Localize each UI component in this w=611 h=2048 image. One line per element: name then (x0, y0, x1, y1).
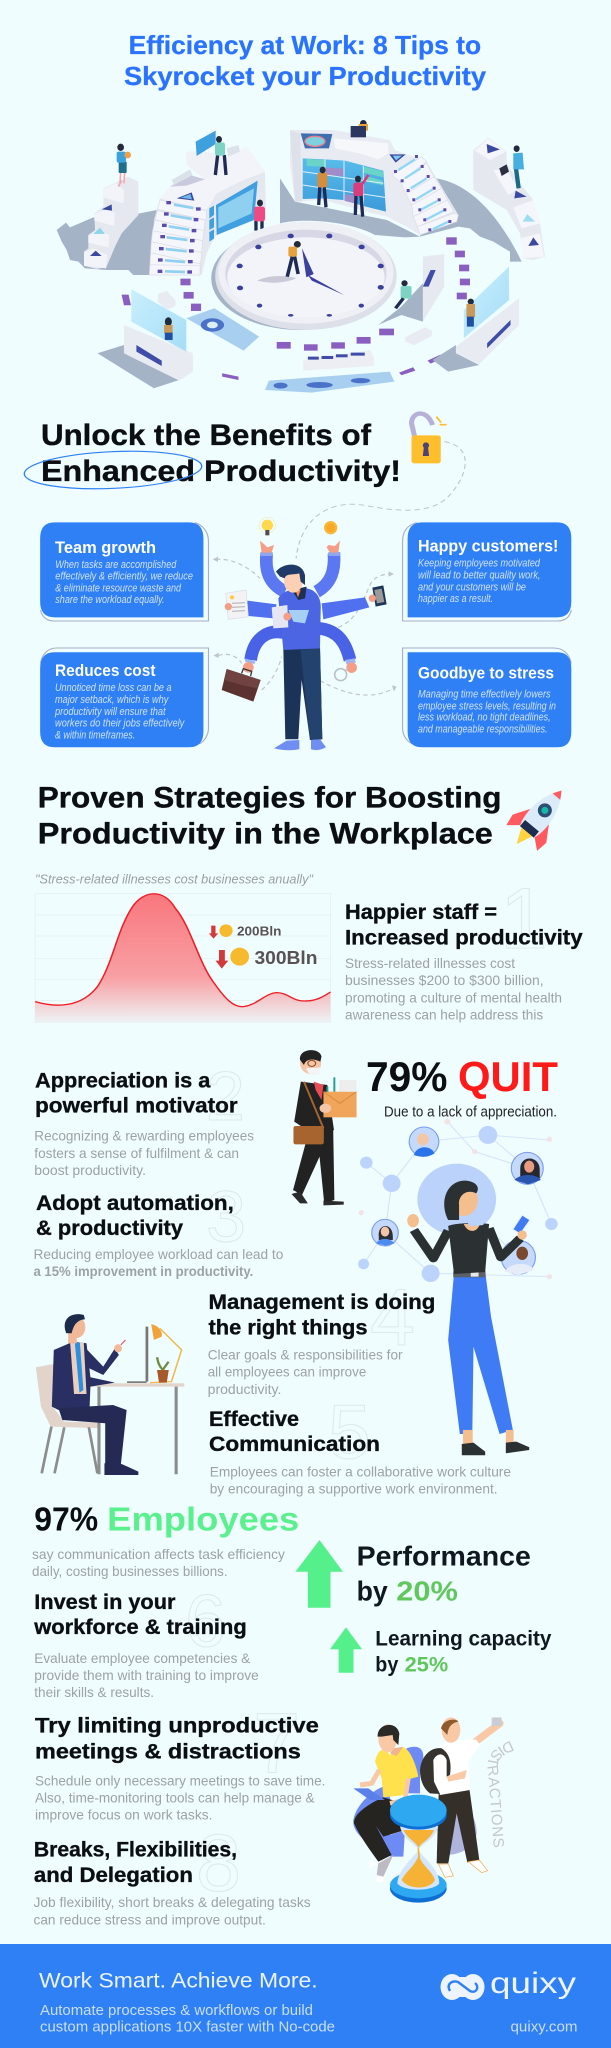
standing man (420, 1717, 502, 1877)
title: Efficiency at Work: 8 Tips to (129, 30, 481, 60)
dashed arrows around figure (216, 559, 393, 695)
card: team growth: effectively & efficiently, we reduce (55, 571, 193, 583)
tip 3: automation: Reducing employee workload can lead to (34, 1246, 284, 1262)
card: goodbye to stress (418, 665, 556, 735)
card: reduces cost: productivity will ensure that (54, 706, 167, 718)
left stairs with woman (84, 144, 138, 269)
heading: unlock the benefits: Unlock the Benefits of (41, 419, 372, 452)
chart values (237, 925, 318, 968)
right half of the office (280, 120, 545, 262)
icon: paper (226, 590, 248, 619)
tip 4: management: the right things (208, 1316, 368, 1339)
icon: open padlock (412, 414, 447, 463)
footer message: custom applications 10X faster with No-code (40, 2019, 335, 2036)
tip 6: training: 6 (185, 1580, 226, 1663)
purple floor tiles (122, 237, 470, 380)
tip 4: management: Clear goals & responsibilities for (208, 1346, 403, 1362)
tip 8: breaks: Job flexibility, short breaks & delegating tasks (34, 1894, 311, 1910)
tip 7: meetings: meetings & distractions (35, 1740, 301, 1764)
card: team growth: Team growth (55, 539, 156, 557)
tip 6: training: their skills & results. (34, 1684, 154, 1700)
tip 7: meetings: Try limiting unproductive (35, 1713, 319, 1737)
right tower steps (392, 157, 458, 235)
clock (211, 222, 397, 330)
tip 8: breaks: and Delegation (34, 1864, 193, 1887)
tip 1: happier staff: businesses $200 to $300 billion, (345, 972, 544, 988)
chart values: 300Bln (254, 948, 318, 968)
card: team growth (55, 539, 193, 606)
card: goodbye to stress: Goodbye to stress (418, 665, 554, 683)
distractions curved label: DISTRACTIONS (488, 1741, 514, 1848)
footer band (0, 1944, 611, 2048)
tip 7: meetings: improve focus on work tasks. (35, 1807, 212, 1823)
tip 5: communication: Employees can foster a collaborative work culture (210, 1463, 511, 1479)
stat: learning capacity by 25% (375, 1628, 552, 1677)
left tower building (149, 131, 266, 275)
tip 1: happier staff: Stress-related illnesses cost (345, 955, 515, 971)
icon: tablet and cup (288, 610, 309, 623)
heading: unlock the benefits: Enhanced Productivity! (41, 455, 401, 488)
stat: learning capacity by 25%: Learning capacity (375, 1628, 552, 1651)
tip 8: breaks: can reduce stress and improve output. (34, 1911, 266, 1927)
benefits illustration layer (23, 414, 571, 747)
highlight ellipse (23, 448, 203, 492)
card: reduces cost: workers do their jobs effectively (55, 718, 185, 730)
stat: learning capacity by 25%: by (375, 1654, 399, 1677)
card backgrounds (40, 522, 571, 747)
trousers and shoes (283, 647, 322, 740)
tip 2: appreciation: 2 (206, 1057, 245, 1135)
stat: 97% employees: daily, costing businesses billions. (32, 1563, 228, 1579)
illustration: man quitting with box (291, 1050, 357, 1205)
tip 5: communication: Communication (209, 1433, 380, 1456)
network links (364, 1122, 551, 1277)
tip 4: management: all employees can improve (208, 1364, 366, 1380)
card: goodbye to stress: and manageable responsibilities. (418, 723, 548, 735)
stat: 79% quit: Due to a lack of appreciation. (384, 1104, 557, 1120)
heading: proven strategies: Productivity in the Workplace (38, 817, 493, 850)
hero illustration: isometric clock office (57, 120, 545, 393)
card: reduces cost: major setback, which is why (55, 694, 169, 706)
arrow: performance up (295, 1540, 343, 1608)
tip 4: management: productivity. (208, 1381, 281, 1397)
tip 7: meetings (35, 1697, 325, 1823)
tip 2: appreciation: Recognizing & rewarding employees (34, 1128, 254, 1144)
tip 7: meetings: Also, time-monitoring tools can help manage & (35, 1790, 315, 1806)
tip 7: meetings: 7 (253, 1697, 300, 1792)
icon: magnifier ring (335, 669, 347, 681)
right stairs with man (473, 138, 545, 260)
arrow: learning up (330, 1627, 362, 1673)
chart caption: "Stress-related illnesses cost businesses anually" (35, 873, 314, 887)
illustration: woman with network (358, 1119, 558, 1455)
stat: 97% employees: Employees (107, 1501, 299, 1538)
tip 4: management: Management is doing (208, 1291, 435, 1314)
illustration: man at desk (36, 1314, 184, 1475)
tip 7: meetings: Schedule only necessary meetings to save time. (35, 1772, 325, 1788)
card: team growth: & eliminate resource waste and (55, 582, 182, 594)
card: goodbye to stress: less workload, no tight deadlines, (418, 712, 551, 724)
stat: 97% employees: 97% (34, 1501, 98, 1538)
tip 1: happier staff: 1 (500, 871, 548, 967)
icon: phone (372, 585, 387, 607)
icon: light bulb (259, 517, 275, 535)
card: reduces cost: & within timeframes. (55, 729, 135, 741)
seat blobs (353, 1747, 423, 1853)
tip 2: appreciation (34, 1057, 254, 1178)
down arrows and coins (209, 926, 218, 939)
tip 5: communication (209, 1389, 511, 1496)
heading: proven strategies: Proven Strategies for Boosting (38, 782, 502, 815)
tip 3: automation: & productivity (36, 1217, 183, 1240)
woman figure (407, 1181, 530, 1455)
card: reduces cost: Reduces cost (55, 662, 156, 680)
brand name (490, 1967, 578, 2036)
tip 6: training: Invest in your (34, 1591, 175, 1614)
tip 1: happier staff (345, 871, 583, 1022)
stat: performance by 20%: 20% (396, 1576, 458, 1607)
card: reduces cost: Unnoticed time loss can be a (55, 682, 172, 694)
tip 6: training: Evaluate employee competencies & (34, 1650, 251, 1666)
area chart: cost of stress (35, 894, 330, 1023)
icon: rocket (500, 776, 578, 858)
illustration: people and hourglass (353, 1717, 514, 1903)
tip 4: management (208, 1273, 435, 1397)
tip 3: automation (34, 1178, 284, 1279)
arms (251, 553, 350, 660)
heading: proven strategies (38, 782, 502, 850)
title (124, 30, 487, 91)
brand name: quixy (490, 1967, 576, 2000)
title: Skyrocket your Productivity (124, 61, 487, 91)
icon: coin (324, 521, 337, 534)
stat: performance by 20% (357, 1540, 531, 1607)
tip 1: happier staff: Increased productivity (345, 926, 583, 949)
icon: quixy logo (440, 1974, 484, 2000)
tip 2: appreciation: fosters a sense of fulfilment & can (34, 1145, 239, 1161)
torso and head (278, 588, 321, 650)
stat: 97% employees (32, 1501, 299, 1579)
tip 5: communication: Effective (209, 1408, 299, 1431)
card: team growth: When tasks are accomplished (55, 559, 177, 571)
avatars (372, 1127, 543, 1275)
tip 1: happier staff: awareness can help address this (345, 1006, 543, 1022)
tip 5: communication: by encouraging a supportive work environment. (210, 1480, 498, 1496)
dashed connector from lock (296, 442, 465, 558)
heading: unlock the benefits (41, 419, 401, 488)
card: team growth: share the workload equally. (55, 594, 164, 606)
hourglass (390, 1795, 447, 1903)
stat: performance by 20%: by (357, 1576, 388, 1607)
icon: briefcase (222, 669, 261, 702)
card: goodbye to stress: Managing time effectively lowers (418, 688, 551, 700)
footer message: Automate processes & workflows or build (40, 2002, 313, 2019)
tip 2: appreciation: powerful motivator (35, 1095, 238, 1118)
tip 8: breaks: Breaks, Flexibilities, (34, 1839, 237, 1862)
stat: 79% quit: QUIT (458, 1053, 558, 1100)
card: happy customers: will lead to better quality work, (418, 570, 540, 582)
multitasking man with six arms (213, 517, 397, 750)
tip 1: happier staff: promoting a culture of mental health (345, 989, 562, 1005)
left half of the office (57, 131, 266, 275)
stat: learning capacity by 25%: 25% (405, 1654, 449, 1677)
card: happy customers: Happy customers! (418, 537, 558, 555)
tip 4: management: 4 (370, 1273, 415, 1363)
footer message: Work Smart. Achieve More. (39, 1969, 318, 1992)
footer message (39, 1969, 335, 2036)
tip 1: happier staff: Happier staff = (345, 901, 497, 924)
stat: 79% quit: 79% (366, 1053, 447, 1100)
card outlines (41, 523, 571, 744)
card: happy customers: and your customers will be (418, 581, 526, 593)
stat: 97% employees: say communication affects task efficiency (32, 1546, 285, 1562)
card: reduces cost (54, 662, 185, 741)
tip 2: appreciation: boost productivity. (34, 1162, 146, 1178)
stat: performance by 20%: Performance (357, 1540, 531, 1571)
tower steps (149, 200, 207, 275)
floor shadow right (420, 178, 522, 262)
tip 6: training: provide them with training to improve (34, 1667, 259, 1683)
card: happy customers: Keeping employees motivated (418, 558, 541, 570)
card: happy customers: happier as a result. (418, 593, 493, 605)
tower with video wall (290, 120, 458, 235)
tip 3: automation: 3 (206, 1178, 246, 1258)
tip 5: communication: 5 (328, 1389, 371, 1475)
floor shadow left (57, 210, 157, 275)
lower platforms and screens (97, 254, 519, 393)
card: goodbye to stress: employee stress levels, resulting in (418, 700, 556, 712)
tip 6: training: workforce & training (33, 1616, 247, 1639)
tip 8: breaks (34, 1819, 311, 1927)
tip 3: automation: a 15% improvement in productivity. (34, 1263, 253, 1279)
tip 3: automation: Adopt automation, (36, 1192, 234, 1215)
sitting man (353, 1724, 418, 1883)
tip 2: appreciation: Appreciation is a (35, 1070, 211, 1093)
card: happy customers (418, 537, 558, 605)
chart values: 200Bln (237, 925, 281, 939)
brand name: quixy.com (510, 2019, 578, 2036)
tip 8: breaks: 8 (196, 1819, 241, 1909)
stat: 79% quit (366, 1053, 558, 1120)
tip 6: training (33, 1580, 259, 1700)
